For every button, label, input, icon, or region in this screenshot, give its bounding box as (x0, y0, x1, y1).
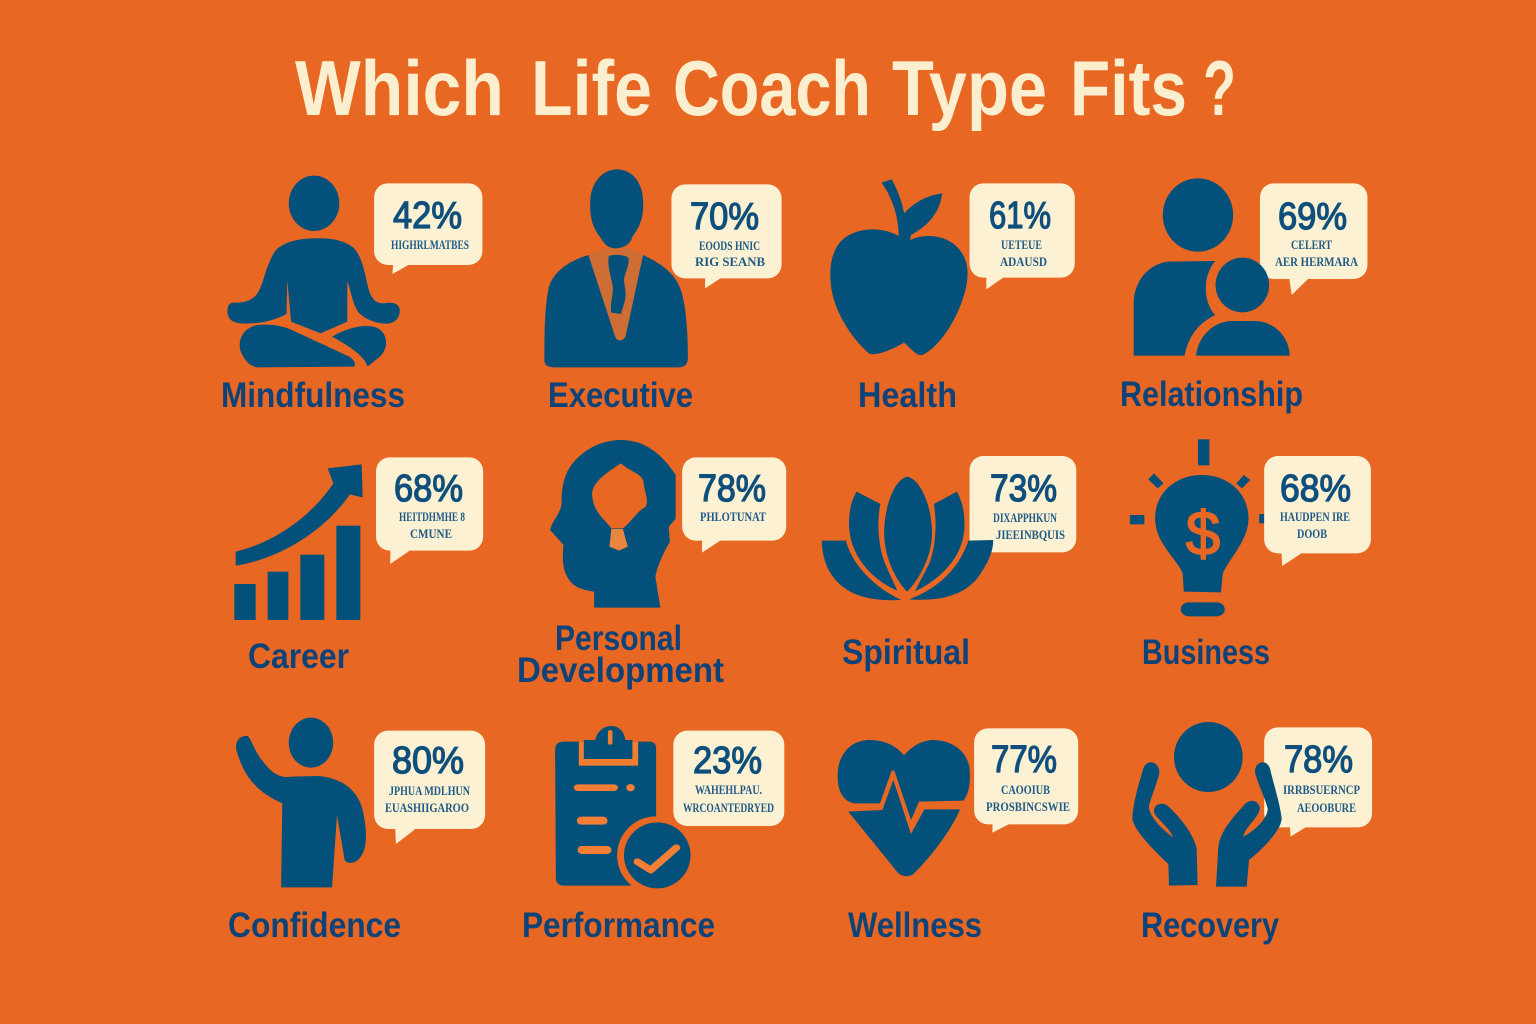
caption: HIGHRLMATBES (391, 237, 469, 252)
title: Which (295, 44, 504, 132)
caption line 1: HAUDPEN IRE (1280, 509, 1350, 524)
caption line 1: HEITDHMHE 8 (399, 509, 465, 524)
callout: 80% (374, 731, 485, 844)
percentage: 68% (1280, 468, 1351, 510)
caption line 1: IRRBSUERNCP (1283, 782, 1360, 797)
caption line 1: UETEUE (1001, 237, 1042, 252)
label: Relationship (1120, 375, 1303, 414)
panel: Executive (544, 169, 782, 415)
callout: 78% (682, 457, 786, 553)
callout: 42% (374, 183, 482, 274)
label: Performance (522, 906, 715, 945)
panel: Career (234, 457, 483, 676)
panel: Personal Development (517, 440, 786, 690)
percentage: 80% (392, 740, 464, 782)
label: Career (248, 637, 349, 676)
percentage: 78% (1284, 739, 1353, 781)
percentage: 42% (393, 195, 462, 237)
percentage: 23% (693, 740, 762, 782)
label: Mindfulness (221, 376, 405, 415)
percentage: 61% (989, 195, 1051, 237)
callout: 23% (673, 731, 784, 826)
caption line 2: DOOB (1297, 526, 1327, 541)
percentage: 69% (1278, 196, 1347, 238)
label line 1: Personal (555, 619, 682, 658)
callout: 61% (970, 183, 1075, 289)
label: Wellness (848, 906, 982, 945)
panel: Mindfulness (221, 176, 482, 415)
caption line 1: JPHUA MDLHUN (389, 783, 470, 798)
icon: light bulb with dollar sign: $ (1186, 500, 1220, 569)
icon: executive with tie (544, 169, 688, 367)
title (295, 44, 1236, 132)
callout: 73% (970, 456, 1076, 552)
caption line 2: JIEEINBQUIS (996, 527, 1065, 542)
label: Health (858, 376, 957, 415)
panel: Recovery (1132, 722, 1372, 945)
caption line 1: CAOOIUB (1001, 782, 1050, 797)
caption line 1: DIXAPPHKUN (993, 510, 1057, 525)
title: Coach (673, 44, 871, 132)
label: Business (1142, 633, 1270, 672)
percentage: 77% (991, 739, 1057, 781)
label: Recovery (1141, 906, 1279, 945)
icon: head profile with keyhole (550, 440, 676, 608)
title: Life (531, 44, 652, 132)
caption line 2: RIG SEANB (695, 254, 765, 269)
caption line 2: AEOOBURE (1297, 800, 1356, 815)
panel: Wellness (838, 728, 1078, 945)
caption line 2: EUASHIIGAROO (385, 800, 469, 815)
callout: 77% (974, 728, 1078, 833)
percentage: 68% (394, 468, 463, 510)
percentage: 73% (990, 468, 1057, 510)
callout: 68% (1264, 456, 1371, 566)
caption line 1: WAHEHLPAU. (695, 782, 762, 797)
panel: Business (1130, 439, 1371, 672)
title: Fits (1070, 44, 1187, 132)
percentage: 78% (698, 468, 766, 510)
icon: apple (830, 179, 968, 355)
caption line 2: ADAUSD (1000, 254, 1047, 269)
callout: 69% (1260, 183, 1367, 295)
caption line 1: EOODS HNIC (699, 238, 760, 253)
icon: lotus (822, 477, 993, 600)
caption line 1: CELERT (1291, 237, 1332, 252)
title: Type (892, 44, 1047, 132)
caption line 2: CMUNE (410, 526, 452, 541)
panel: Health (830, 179, 1075, 415)
panel: Relationship (1120, 178, 1367, 414)
caption line 2: PROSBINCSWIE (986, 799, 1070, 814)
icon: person with raised arm (236, 718, 366, 887)
label: Spiritual (842, 633, 970, 672)
percentage: 70% (690, 196, 759, 238)
label: Confidence (228, 906, 401, 945)
icon: hands holding circle (1132, 722, 1282, 887)
title: ? (1203, 44, 1236, 132)
icon: clipboard with check mark (555, 726, 695, 894)
panel: Performance (522, 726, 784, 945)
caption line 2: WRCOANTEDRYED (683, 800, 774, 815)
panel: Spiritual (822, 456, 1076, 672)
caption line 2: AER HERMARA (1275, 254, 1359, 269)
callout: 78% (1264, 727, 1372, 837)
icon: heart with pulse line (838, 740, 970, 876)
callout: 68% (376, 457, 483, 564)
icon: adult and child (1134, 178, 1290, 356)
icon: meditating person (227, 176, 400, 367)
caption: PHLOTUNAT (700, 509, 766, 524)
label line 2: Development (517, 651, 724, 690)
callout: 70% (671, 184, 782, 288)
icon: light bulb with dollar sign (1130, 439, 1267, 616)
icon: rising bar chart with arrow (234, 464, 363, 620)
label: Executive (548, 376, 693, 415)
panel: Confidence (228, 718, 485, 945)
